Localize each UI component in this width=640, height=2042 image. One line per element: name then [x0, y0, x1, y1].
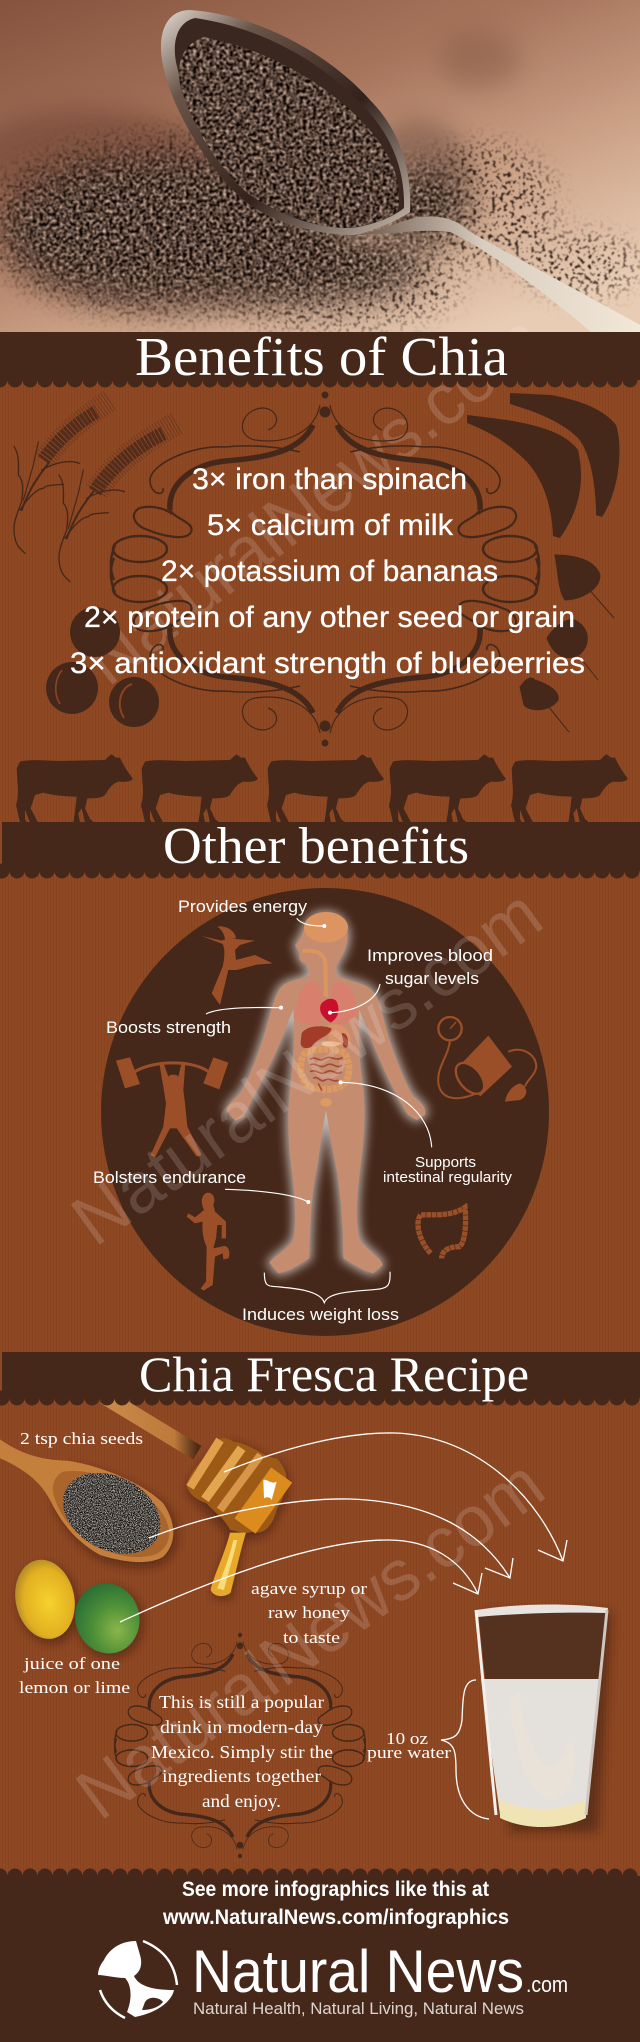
banner: benefits of chia: [0, 326, 640, 387]
ornament: flourish frame behind list: [111, 392, 539, 746]
labels: other benefits: Supports: [415, 1155, 476, 1171]
lungs: [296, 982, 323, 1025]
seeds in spoon: [178, 37, 399, 228]
logo: Natural News wordmark: Natural News: [192, 1938, 524, 2005]
watermark 2: NaturalNews.com: [58, 874, 556, 1261]
icon: blueberries: [46, 607, 159, 727]
photo: chia seeds in a spoon: [0, 0, 640, 333]
banner: chia fresca recipe: [2, 1346, 640, 1402]
labels: recipe ingredients: raw honey: [268, 1603, 351, 1622]
spoon interior shadow: [175, 18, 404, 228]
panel: body circle: [101, 888, 549, 1336]
stomach: [328, 1024, 351, 1046]
leader lines: [206, 918, 432, 1303]
list: chia nutrition facts: 3× antioxidant strength of blueberries: [70, 647, 585, 680]
logo: tagline: Natural Health, Natural Living, Natural News: [193, 1999, 524, 2018]
labels: other benefits: Boosts strength: [106, 1019, 231, 1037]
heading: Benefits of Chia: Benefits of Chia: [135, 326, 508, 387]
watermark 1: NaturalNews.com: [69, 299, 558, 701]
spoon bowl: [161, 10, 410, 235]
icon: weightlifter: [116, 1057, 228, 1157]
labels: recipe ingredients: agave syrup or: [251, 1579, 367, 1598]
labels: recipe ingredients: [19, 1429, 451, 1762]
illustration: wooden spoon with chia seeds: [0, 1439, 177, 1567]
text block: recipe note: and enjoy.: [202, 1791, 281, 1811]
labels: other benefits: intestinal regularity: [383, 1170, 513, 1186]
labels: other benefits: sugar levels: [385, 970, 479, 988]
illustration: honey dipper: [105, 1397, 288, 1600]
large intestine: [301, 1049, 349, 1090]
icon: bananas: [467, 393, 619, 538]
brace: water measure: [441, 1680, 489, 1819]
body: [227, 913, 425, 1273]
spoon handle: [355, 216, 640, 333]
labels: other benefits: Bolsters endurance: [93, 1169, 246, 1187]
liver: [301, 1026, 332, 1048]
pancreas: [322, 1041, 342, 1047]
labels: other benefits: Provides energy: [178, 898, 308, 916]
text block: recipe note: drink in modern-day: [160, 1717, 323, 1737]
labels: recipe ingredients: 2 tsp chia seeds: [20, 1429, 143, 1448]
labels: other benefits: Improves blood: [367, 947, 493, 965]
icon: runner: [187, 1193, 229, 1291]
brain: [304, 912, 348, 943]
arrows: ingredients to glass: [120, 1433, 567, 1622]
illustration: glass of water: [476, 1604, 612, 1832]
ornament: flourish frame behind note: [115, 1633, 365, 1858]
labels: other benefits: [93, 898, 513, 1324]
leader dots: [279, 924, 343, 1204]
footer: [0, 1876, 640, 2042]
list: chia nutrition facts: 2× potassium of bananas: [161, 555, 498, 588]
text block: recipe note: [151, 1692, 333, 1811]
icon: row of cows: [16, 754, 628, 822]
list: chia nutrition facts: [70, 463, 585, 680]
banner: other benefits: [2, 818, 640, 875]
text block: recipe note: ingredients together: [162, 1766, 321, 1786]
labels: recipe ingredients: to taste: [283, 1628, 340, 1647]
list: chia nutrition facts: 5× calcium of milk: [207, 509, 454, 542]
icon: leaves: [520, 555, 614, 732]
small intestine: [310, 1057, 343, 1091]
list: chia nutrition facts: 2× protein of any other seed or grain: [84, 601, 575, 634]
labels: recipe ingredients: lemon or lime: [19, 1678, 130, 1697]
logo: .com: .com: [526, 1972, 568, 1997]
icon: dancer: [202, 926, 273, 1005]
labels: recipe ingredients: pure water: [367, 1743, 451, 1762]
icon: colon: [418, 1207, 466, 1258]
logo: globe: [98, 1941, 177, 2018]
labels: recipe ingredients: 10 oz: [386, 1729, 429, 1748]
text block: recipe note: Mexico. Simply stir the: [151, 1742, 333, 1762]
icon: blood pressure cuff: [438, 1017, 536, 1102]
illustration: lemon and lime: [8, 1554, 147, 1661]
text block: recipe note: This is still a popular: [159, 1692, 324, 1712]
list: chia nutrition facts: 3× iron than spinach: [192, 463, 467, 496]
bladder: [320, 1098, 332, 1107]
footer call to action: See more infographics like this at: [182, 1878, 489, 1901]
heading: Chia Fresca Recipe: Chia Fresca Recipe: [139, 1346, 529, 1402]
kidney: [342, 1033, 348, 1048]
body glow: [227, 913, 425, 1273]
heart: [320, 999, 339, 1023]
esophagus: [303, 951, 326, 997]
heading: Other benefits: Other benefits: [163, 818, 469, 875]
watermark 3: NaturalNews.com: [62, 1444, 558, 1835]
labels: other benefits: Induces weight loss: [242, 1305, 399, 1324]
footer url: www.NaturalNews.com/infographics: [162, 1906, 509, 1929]
icon: wheat stalks: [14, 400, 177, 582]
labels: recipe ingredients: juice of one: [23, 1654, 120, 1673]
illustration: body and silhouettes: [116, 912, 536, 1303]
